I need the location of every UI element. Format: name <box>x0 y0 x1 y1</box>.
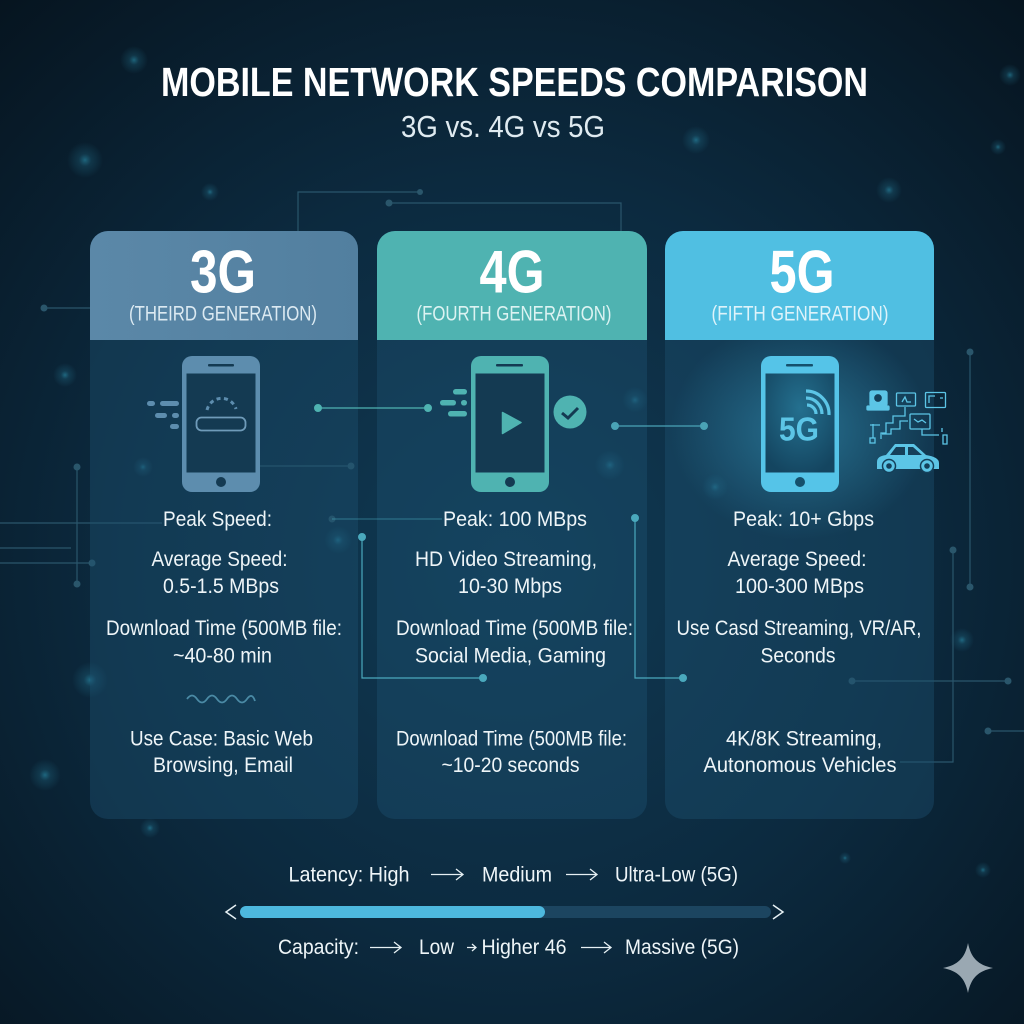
comparison: latency row <box>288 864 738 886</box>
text: download time 4G: Social Media, Gaming <box>415 644 606 668</box>
comparison: capacity row: Low <box>419 936 455 959</box>
icon: 5G phone <box>761 356 839 492</box>
subheading 5G: (FIFTH GENERATION) <box>712 302 888 326</box>
text: average speed 5G: 100-300 MBps <box>735 575 864 598</box>
panel body 4G <box>377 231 647 819</box>
text: peak 4G: Peak: 100 MBps <box>443 508 587 531</box>
text: peak 5G: Peak: 10+ Gbps <box>733 508 874 531</box>
text: average speed 3G <box>152 548 288 598</box>
comparison: progress bar <box>226 905 783 919</box>
text: use case 5G: Use Casd Streaming, VR/AR, <box>676 617 922 640</box>
text: peak speed 3G: Peak Speed: <box>163 508 272 531</box>
panel: 4G <box>377 231 647 819</box>
subheading 3G: (THEIRD GENERATION) <box>129 302 317 326</box>
comparison: capacity row: Massive (5G) <box>625 936 739 959</box>
connector: 4G to 5G <box>612 422 708 430</box>
text: average speed 5G: Average Speed: <box>728 548 866 571</box>
text: hd video 4G: 10-30 Mbps <box>458 575 562 598</box>
comparison: capacity row <box>278 936 739 959</box>
text: 4K streaming 5G <box>704 728 896 777</box>
icon: 5G phone: 5G <box>779 410 819 448</box>
text: hd video 4G: HD Video Streaming, <box>415 548 597 571</box>
comparison: latency row: Medium <box>482 864 552 886</box>
subtitle: 3G vs. 4G vs 5G <box>401 109 605 144</box>
text: use case 4G <box>396 728 627 777</box>
text: use case 4G: ~10-20 seconds <box>442 754 580 777</box>
text: download time 4G <box>396 617 633 668</box>
text: use case 3G <box>130 728 313 777</box>
panel body 5G <box>665 231 934 819</box>
text: 4K streaming 5G: Autonomous Vehicles <box>704 754 896 777</box>
comparison: capacity row: Higher 46 <box>482 936 566 959</box>
text: hd video 4G <box>415 548 597 598</box>
text: average speed 5G <box>728 548 866 598</box>
header 3G <box>90 231 358 340</box>
text: download time 3G: Download Time (500MB file: <box>106 617 342 640</box>
background circuit nodes <box>40 189 1012 734</box>
text: use case 4G: Download Time (500MB file: <box>396 728 627 750</box>
text: average speed 3G: Average Speed: <box>152 548 288 571</box>
phone glow <box>670 320 930 540</box>
connector: text links <box>332 514 686 682</box>
background glowing particles <box>29 46 1021 878</box>
panel body 3G <box>90 231 358 819</box>
text: 4K streaming 5G: 4K/8K Streaming, <box>726 728 882 750</box>
comparison: latency row: Latency: High <box>288 864 410 886</box>
heading 3G: 3G <box>190 238 256 306</box>
subheading 4G: (FOURTH GENERATION) <box>416 302 612 326</box>
icon: 3G phone <box>147 356 260 492</box>
connector: 3G to 4G <box>314 404 432 412</box>
panel: 5G <box>665 231 947 819</box>
title: MOBILE NETWORK SPEEDS COMPARISON <box>161 59 868 105</box>
text: use case 3G: Use Case: Basic Web <box>130 728 313 750</box>
comparison: latency row: Ultra-Low (5G) <box>615 864 738 886</box>
text: use case 5G <box>676 617 922 668</box>
icon: 4G phone <box>440 356 586 492</box>
text: average speed 3G: 0.5-1.5 MBps <box>163 575 279 598</box>
text: download time 3G: ~40-80 min <box>173 644 272 668</box>
background circuit lines <box>0 192 1024 762</box>
header 5G <box>665 231 934 340</box>
text: download time 3G <box>106 617 342 668</box>
text: download time 4G: Download Time (500MB file: <box>396 617 633 640</box>
heading 5G: 5G <box>770 238 834 306</box>
heading 4G: 4G <box>480 238 544 306</box>
icon: sparkle <box>943 943 993 993</box>
text: use case 5G: Seconds <box>760 644 836 668</box>
icon: wave <box>187 696 255 702</box>
icon: connected devices and car <box>867 391 947 472</box>
comparison: capacity row: Capacity: <box>278 936 359 959</box>
header 4G <box>377 231 647 340</box>
text: use case 3G: Browsing, Email <box>153 754 293 777</box>
panel: 3G <box>90 231 358 819</box>
